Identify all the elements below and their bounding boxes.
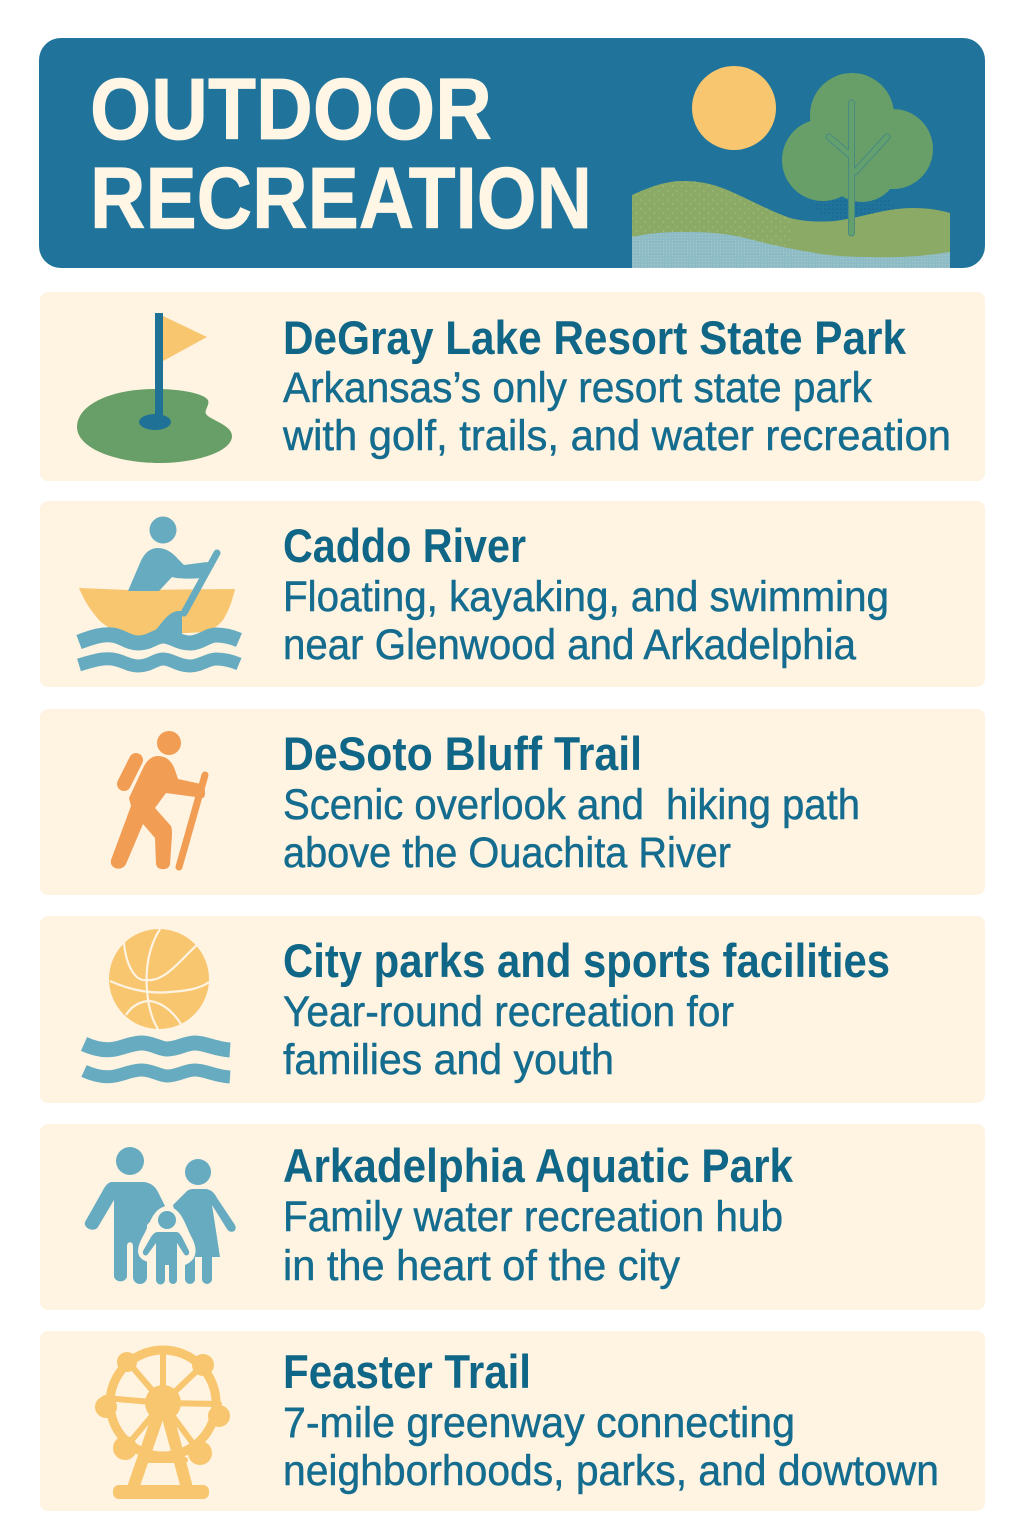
panel: DeGray Lake Resort State Park: [40, 292, 985, 481]
title: [90, 61, 592, 247]
panel: DeSoto Bluff Trail: [40, 709, 985, 895]
text: Arkadelphia Aquatic Park: [283, 1139, 794, 1290]
title: OUTDOOR: [90, 61, 492, 158]
icon: family: [85, 1147, 236, 1284]
text: DeGray Lake: Arkansas’s only resort state park: [283, 364, 872, 412]
icon: ferris wheel: [95, 1350, 230, 1499]
text: Caddo River: Floating, kayaking, and swimming: [283, 573, 889, 621]
text: DeSoto Bluff Trail: [283, 727, 860, 877]
title: RECREATION: [90, 150, 592, 247]
header banner: [39, 38, 985, 268]
text: Caddo River: Caddo River: [283, 519, 526, 572]
illustration: sun, tree and hills: [632, 66, 950, 268]
text: Feaster Trail: [283, 1345, 939, 1495]
icon: paddler in boat: [79, 516, 239, 666]
panel: Caddo River: [40, 501, 985, 687]
text: City parks: City parks and sports facilities: [283, 934, 890, 987]
text: DeGray Lake: DeGray Lake Resort State Park: [283, 311, 907, 364]
panel: City parks and sports facilities: [40, 916, 985, 1103]
text: City parks: families and youth: [283, 1036, 614, 1084]
panel: Arkadelphia Aquatic Park: [40, 1124, 985, 1310]
icon: golf flag: [77, 313, 232, 463]
text: Caddo River: [283, 519, 889, 669]
text: Feaster Trail: 7-mile greenway connecting: [283, 1399, 795, 1447]
text: Caddo River: near Glenwood and Arkadelphia: [283, 621, 856, 669]
text: Arkadelphia Aquatic Park: Arkadelphia Aquatic Park: [283, 1139, 794, 1192]
text: DeGray Lake: with golf, trails, and water recreation: [282, 412, 951, 460]
text: Feaster Trail: Feaster Trail: [283, 1345, 531, 1398]
text: DeSoto Bluff Trail: above the Ouachita River: [283, 829, 731, 877]
text: Arkadelphia Aquatic Park: in the heart of the city: [283, 1242, 680, 1290]
text: City parks: [283, 934, 890, 1084]
text: Arkadelphia Aquatic Park: Family water recreation hub: [283, 1193, 783, 1241]
icon: hiker: [111, 731, 205, 869]
text: DeSoto Bluff Trail: DeSoto Bluff Trail: [283, 727, 642, 780]
text: DeGray Lake: [282, 311, 951, 460]
panel: Feaster Trail: [40, 1331, 985, 1511]
text: DeSoto Bluff Trail: Scenic overlook and hiking path: [283, 781, 860, 829]
text: City parks: Year-round recreation for: [283, 988, 734, 1036]
text: Feaster Trail: neighborhoods, parks, and dowtown: [283, 1447, 939, 1495]
icon: basketball over water: [84, 929, 230, 1077]
